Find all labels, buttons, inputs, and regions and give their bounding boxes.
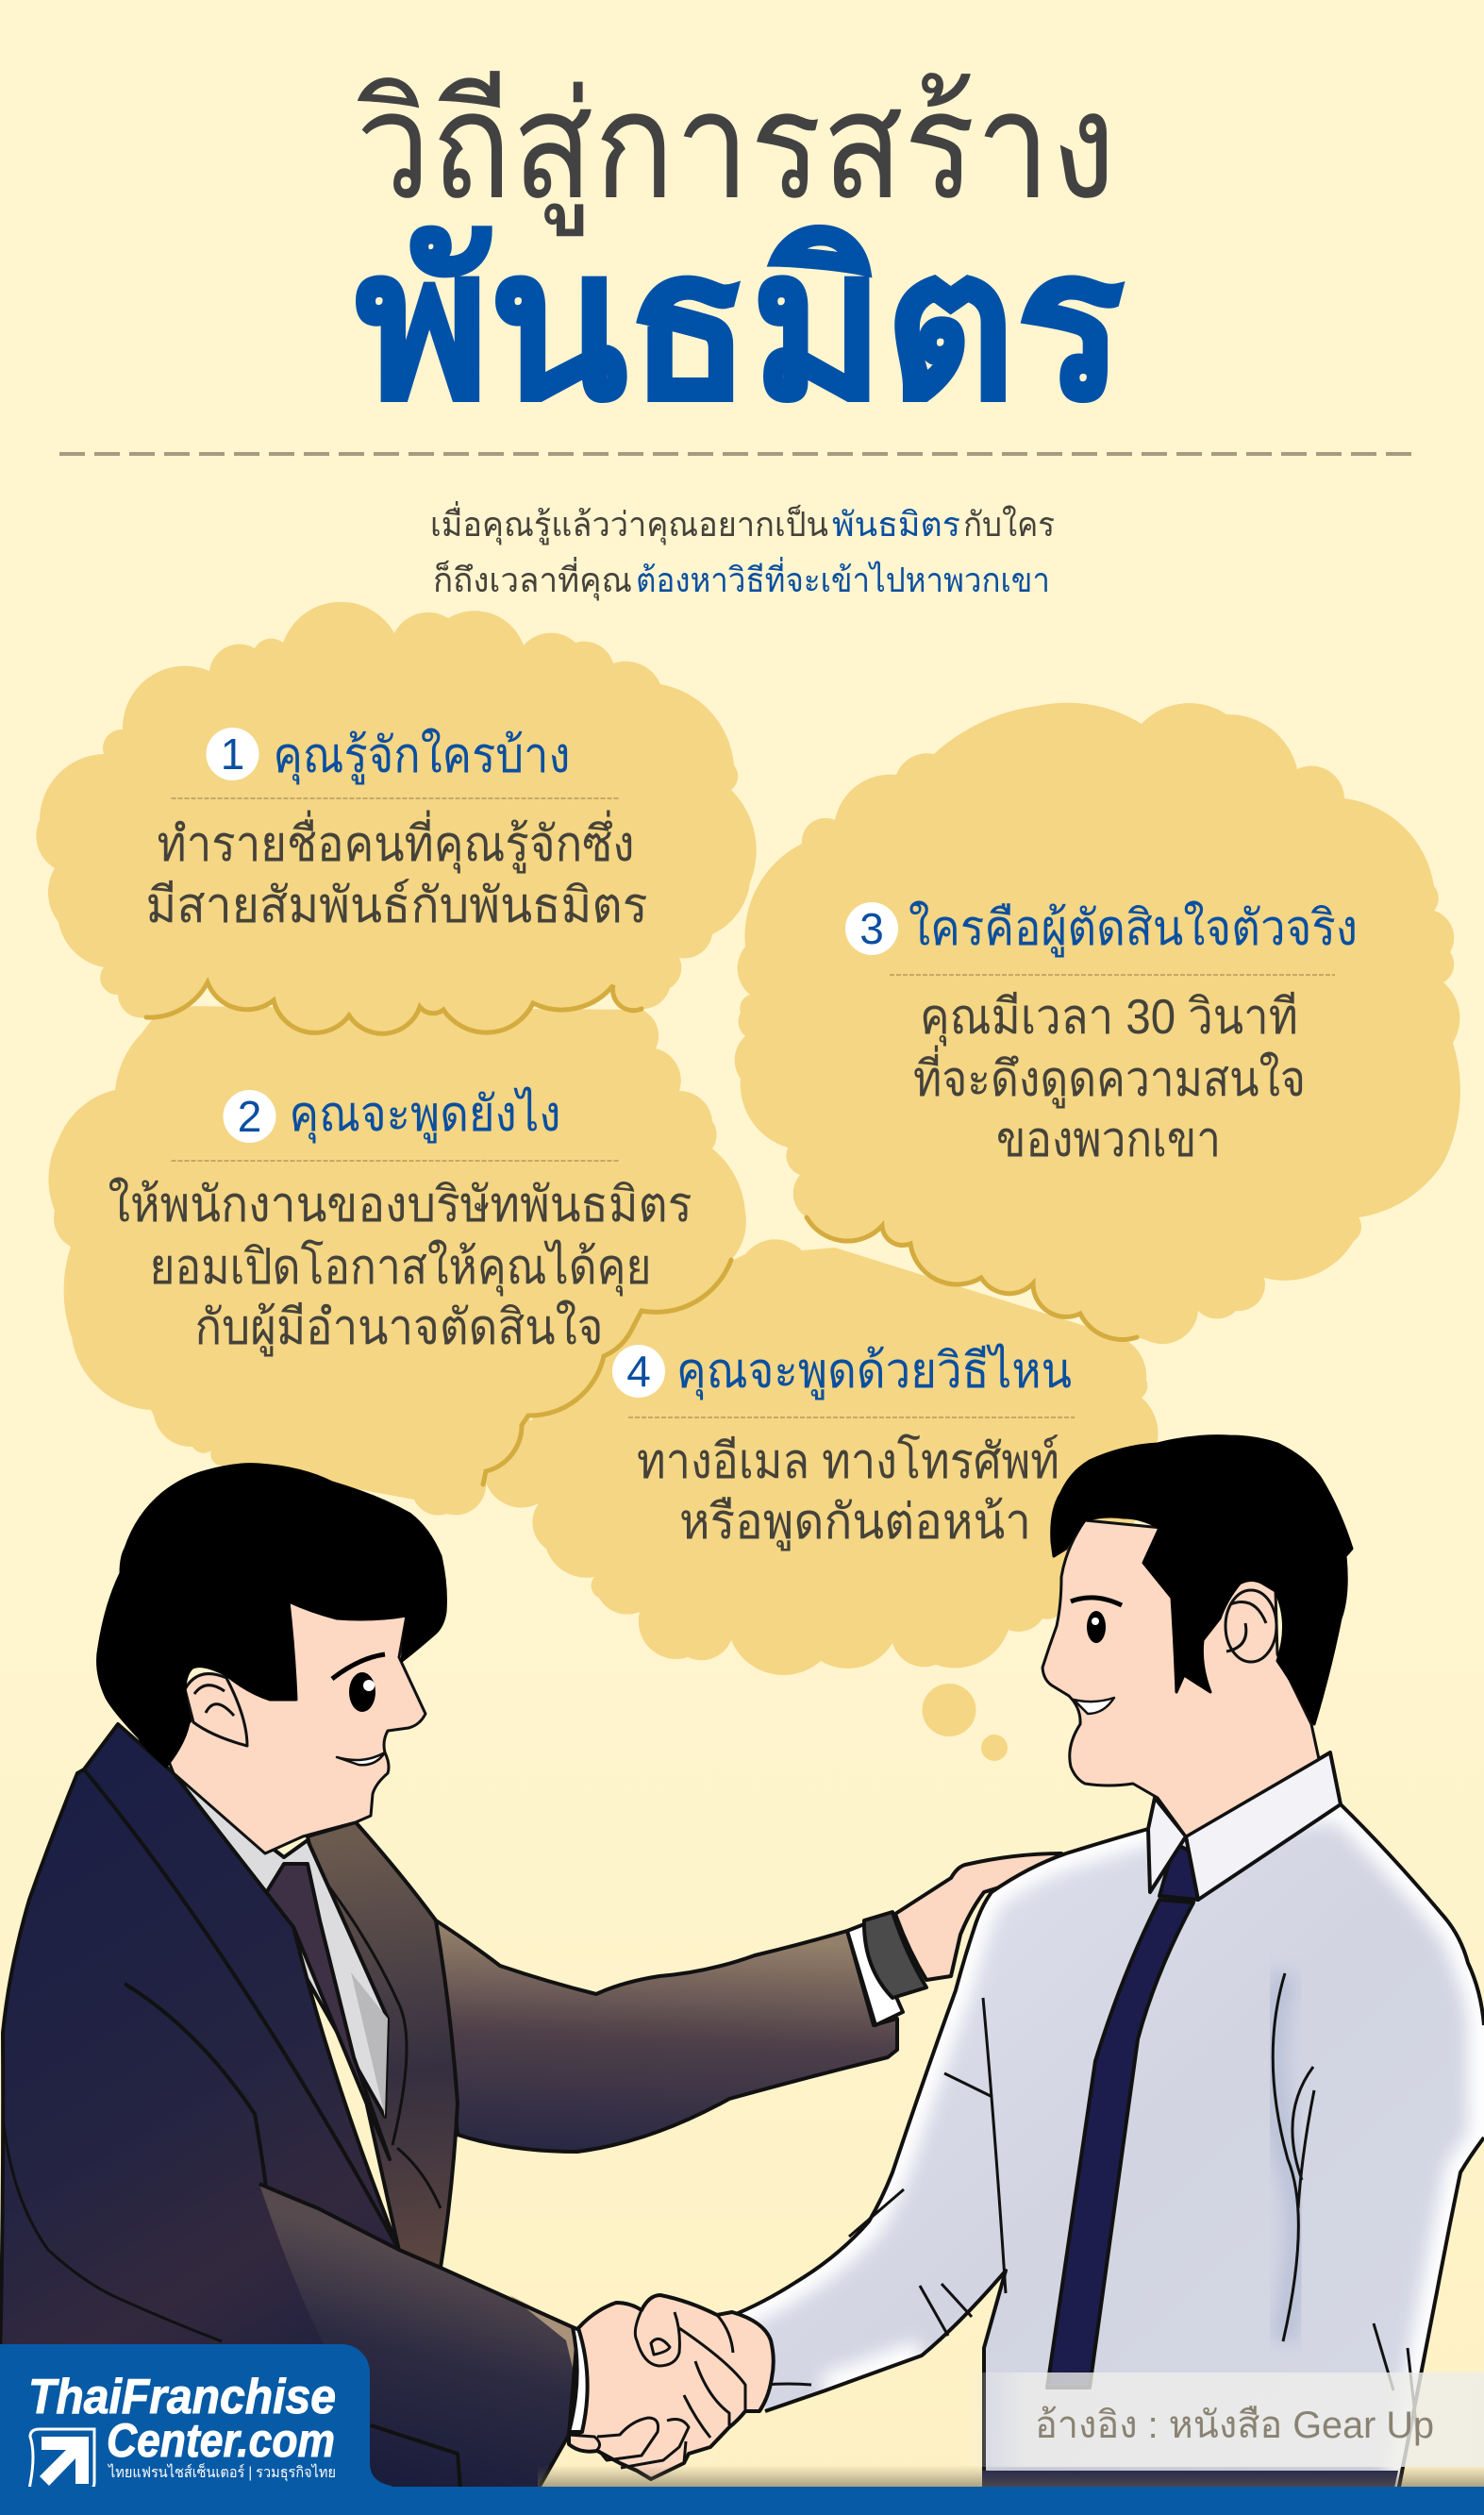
logo panel: [0, 2344, 392, 2515]
callout 3: [845, 900, 1358, 1167]
cloud 1 shape: [36, 602, 757, 1033]
callout 4: คุณจะพูดด้วยวิธีไหน: [676, 1343, 1072, 1400]
callout 2: คุณจะพูดยังไง: [289, 1086, 560, 1144]
callout 3: 3: [859, 904, 884, 953]
thought bubble dots: [923, 1684, 1008, 1761]
title: วิถีสู่การสร้าง: [356, 63, 1116, 236]
intro text: [430, 501, 1055, 601]
citation strip: [965, 2372, 1484, 2467]
callout 4: 4: [626, 1347, 651, 1396]
logo panel: ThaiFranchise: [28, 2370, 336, 2424]
logo panel: ไทยแฟรนไชส์เซ็นเตอร์ | รวมธุรกิจไทย: [107, 2462, 336, 2482]
callout 2: กับผู้มีอำนาจตัดสินใจ: [194, 1299, 604, 1357]
cloud 4 shape: [486, 1239, 1158, 1675]
right man: body and shirt: [729, 1752, 1484, 2491]
citation strip: อ้างอิง : หนังสือ Gear Up: [1035, 2405, 1434, 2446]
callout 2: ยอมเปิดโอกาสให้คุณได้คุย: [149, 1239, 651, 1297]
callout 3: ของพวกเขา: [996, 1113, 1221, 1167]
intro text: ต้องหาวิธีที่จะเข้าไปหาพวกเขา: [636, 557, 1050, 599]
intro text: เมื่อคุณรู้แล้วว่าคุณอยากเป็น: [430, 501, 828, 545]
title: พันธมิตร: [356, 209, 1125, 443]
callout 3: ที่จะดึงดูดความสนใจ: [913, 1045, 1306, 1109]
left man: patting arm: [436, 1853, 1061, 2152]
intro text: ก็ถึงเวลาที่คุณ: [433, 557, 632, 601]
callout 1: คุณรู้จักใครบ้าง: [274, 728, 570, 785]
intro text: พันธมิตร: [832, 505, 960, 544]
callout 4: ทางอีเมล ทางโทรศัพท์: [637, 1434, 1059, 1489]
logo panel: Center.com: [107, 2414, 335, 2467]
title: [356, 63, 1125, 443]
cloud 3 shape: [735, 703, 1460, 1344]
callout 2: ให้พนักงานของบริษัทพันธมิตร: [108, 1177, 692, 1232]
callout 4: [612, 1343, 1075, 1551]
callout 4: หรือพูดกันต่อหน้า: [679, 1495, 1031, 1551]
left man: torso and jacket: [0, 1724, 577, 2491]
callout 3: คุณมีเวลา 30 วินาที: [920, 990, 1298, 1047]
handshake: [569, 2295, 774, 2479]
callout 1: ทำรายชื่อคนที่คุณรู้จักซึ่ง: [157, 810, 634, 874]
callout 1: 1: [221, 729, 244, 779]
bottom shadow: [538, 2465, 1484, 2487]
callout 1: มีสายสัมพันธ์กับพันธมิตร: [145, 879, 647, 933]
intro text: กับใคร: [963, 505, 1055, 544]
callout 1: [145, 728, 647, 933]
left man: head: [98, 1465, 445, 1853]
callout 2: 2: [238, 1092, 261, 1141]
icon: arrow box: [30, 2429, 94, 2491]
callout 3: ใครคือผู้ตัดสินใจตัวจริง: [909, 900, 1358, 958]
callout 2: [108, 1086, 692, 1357]
bottom bar: [0, 2487, 1484, 2515]
right man: head: [1042, 1436, 1352, 1836]
cloud 2 shape: [48, 1006, 746, 1516]
